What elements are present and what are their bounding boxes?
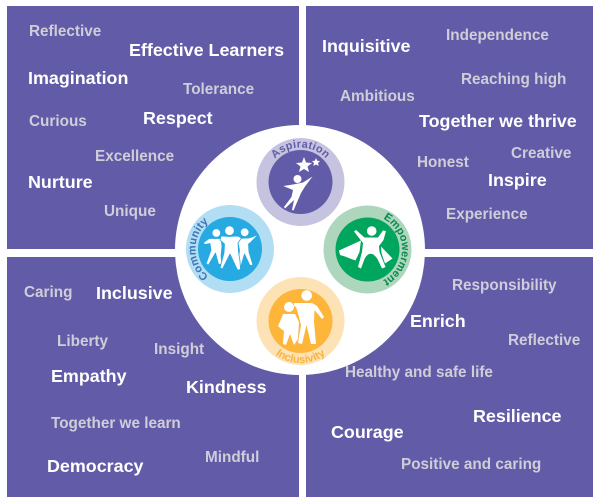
panel: bottom left: Liberty [57,333,108,350]
panel: top right: Inspire [488,170,547,190]
panel: bottom right: Resilience [473,406,562,426]
panel: top left [7,6,299,249]
panel: top left: Tolerance [183,81,254,98]
panel: top right: Creative [511,145,571,162]
panel: bottom right: Courage [331,422,404,442]
panel: bottom right: Positive and caring [401,456,541,473]
panel: bottom right [306,257,593,497]
panel: top right: Reaching high [461,71,566,88]
panel: bottom left [7,257,299,497]
panel: bottom right: Reflective [508,332,580,349]
panel: top right: Independence [446,27,549,44]
panel: top left: Respect [143,108,213,128]
panel: bottom left: Together we learn [51,415,181,432]
panel: top right [306,6,593,249]
panel: top left: Nurture [28,172,93,192]
panel: bottom left: Kindness [186,377,267,397]
badge: Community [186,205,274,293]
icon: three people [203,226,258,270]
icon: adult and child [278,290,324,345]
panel: bottom left: Insight [154,341,204,358]
panel: top left: Unique [104,203,156,220]
panel: bottom left: Mindful [205,449,259,466]
panel: top left: Curious [29,113,87,130]
central white circle [175,125,425,375]
badge: Aspiration [256,138,344,226]
panel: bottom right: Enrich [410,311,466,331]
panel: top right: Ambitious [340,88,415,105]
panel: top left: Effective Learners [129,40,284,60]
badge: Community: Community [190,218,208,280]
panel: bottom right: Responsibility [452,277,557,294]
panel: top left: Reflective [29,23,101,40]
panel: bottom right: Healthy and safe life [345,364,493,381]
panel: bottom left: Democracy [47,456,144,476]
panel: bottom left: Inclusive [96,283,173,303]
icon: stars and reaching figure [283,157,320,210]
panel: top right: Together we thrive [419,111,577,131]
icon: caped hero [339,226,392,268]
badge: Empowerment [324,206,412,294]
panel: bottom left: Empathy [51,366,127,386]
panel: top right: Inquisitive [322,36,411,56]
panel: top left: Excellence [95,148,174,165]
badge: Inclusivity: Inclusivity [276,348,324,364]
panel: top right: Honest [417,154,469,171]
panel: top right: Experience [446,206,528,223]
badge: Aspiration: Aspiration [272,140,329,158]
badge: Inclusivity [256,277,344,365]
panel: bottom left: Caring [24,284,72,301]
badge: Empowerment: Empowerment [383,212,408,286]
panel: top left: Imagination [28,68,128,88]
